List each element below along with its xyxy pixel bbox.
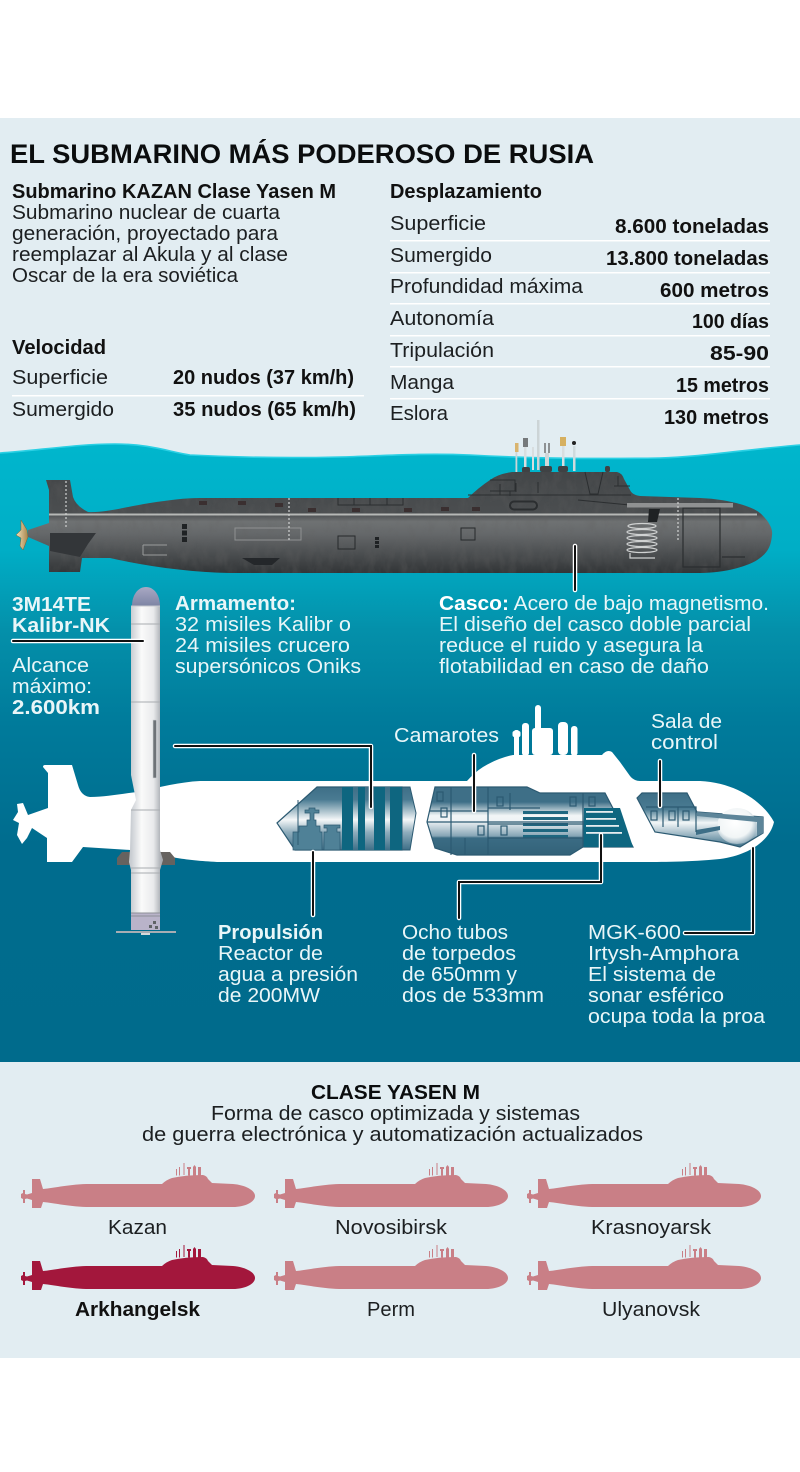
label: sonar: ocupa toda la proa — [588, 1006, 766, 1028]
label: torpedoes: de torpedos — [402, 943, 516, 965]
text block: submarine description: Submarino nuclear de cuarta — [12, 202, 281, 224]
compartment: propulsion — [277, 787, 416, 850]
fleet icon: Novosibirsk — [274, 1163, 508, 1208]
table: desplazamiento and specifications: Sumergido — [390, 245, 492, 267]
illustration: white submarine silhouette cutaway — [13, 705, 774, 862]
table: desplazamiento and specifications: Manga — [390, 372, 455, 394]
label: Arkhangelsk: Arkhangelsk — [75, 1299, 201, 1321]
leader line: sala de control — [658, 761, 662, 806]
label: torpedoes: Ocho tubos — [402, 922, 508, 944]
fleet icon: Perm — [274, 1245, 508, 1290]
label: casco: reduce el ruido y asegura la — [439, 635, 704, 657]
label: camarotes: Camarotes — [394, 725, 499, 747]
table: desplazamiento and specifications: Superficie — [390, 213, 486, 235]
leader line: armamento — [175, 746, 371, 807]
title: EL SUBMARINO MÁS PODEROSO DE RUSIA — [10, 138, 594, 169]
label: 3M14TE Kalibr-NK: 3M14TE — [12, 594, 91, 616]
text block: submarine description: reemplazar al Akula y al clase — [12, 244, 288, 266]
table: desplazamiento and specifications: 600 metros — [660, 280, 769, 302]
label: 3M14TE Kalibr-NK: máximo: — [12, 676, 92, 698]
table: desplazamiento and specifications: Eslora — [390, 403, 449, 425]
label: torpedoes: de 650mm y — [402, 964, 517, 986]
table: velocidad — [12, 337, 364, 421]
masts — [515, 420, 610, 473]
table: velocidad: 20 nudos (37 km/h) — [173, 367, 354, 389]
label: casco: flotabilidad en caso de daño — [439, 656, 709, 678]
heading: clase Yasen M: de guerra electrónica y automatización actualizados — [142, 1124, 643, 1146]
label: armamento: supersónicos Oniks — [175, 656, 361, 678]
table: velocidad: Velocidad — [12, 337, 106, 359]
silhouette masts — [512, 705, 578, 758]
table: velocidad: Sumergido — [12, 399, 114, 421]
table: desplazamiento and specifications: 8.600 toneladas — [615, 216, 769, 238]
heading: clase Yasen M — [142, 1082, 643, 1146]
label: armamento: 32 misiles Kalibr o — [175, 614, 351, 636]
label: 3M14TE Kalibr-NK: 2.600km — [12, 697, 100, 719]
text block: submarine description: generación, proyectado para — [12, 223, 279, 245]
leader line: propulsion — [311, 852, 315, 915]
heading: clase Yasen M: CLASE YASEN M — [311, 1082, 480, 1104]
label: Perm: Perm — [367, 1299, 415, 1321]
label: torpedoes — [402, 922, 544, 1007]
label: sala de control: Sala de — [651, 711, 722, 733]
label: sonar: El sistema de — [588, 964, 716, 986]
label: Kazan: Kazan — [108, 1217, 167, 1239]
label: sonar: sonar esférico — [588, 985, 724, 1007]
table: desplazamiento and specifications: 130 metros — [664, 407, 769, 429]
fleet icon: Ulyanovsk — [527, 1245, 761, 1290]
water background with wave line — [0, 444, 800, 1062]
leader line: casco — [573, 546, 577, 590]
hull — [28, 472, 772, 573]
label: Novosibirsk: Novosibirsk — [335, 1217, 448, 1239]
heading: clase Yasen M: Forma de casco optimizada y sistemas — [211, 1103, 580, 1125]
label: sala de control: control — [651, 732, 718, 754]
leader line: camarotes — [472, 755, 476, 811]
fleet icon: Krasnoyarsk — [527, 1163, 761, 1208]
fleet icon: Arkhangelsk highlighted — [21, 1245, 255, 1290]
label: armamento: Armamento: — [175, 593, 296, 615]
table: desplazamiento and specifications: Desplazamiento — [390, 181, 542, 203]
table: velocidad: 35 nudos (65 km/h) — [173, 399, 356, 421]
label: sonar: Irtysh-Amphora — [588, 943, 740, 965]
label: 3M14TE Kalibr-NK: Alcance — [12, 655, 89, 677]
table: desplazamiento and specifications: Tripulación — [390, 340, 494, 362]
leader line: sonar — [685, 848, 753, 933]
label: Krasnoyarsk: Krasnoyarsk — [591, 1217, 712, 1239]
text block: submarine description: Submarino KAZAN Clase Yasen M — [12, 181, 336, 203]
compartment: control and sonar — [637, 793, 763, 847]
label: propulsion: de 200MW — [218, 985, 320, 1007]
label: 3M14TE Kalibr-NK: Kalibr-NK — [12, 615, 111, 637]
label: armamento: 24 misiles crucero — [175, 635, 350, 657]
leader line: torpedoes — [459, 835, 601, 918]
label: propulsion: agua a presión — [218, 964, 358, 986]
table: velocidad: Superficie — [12, 367, 108, 389]
text block: submarine description: Oscar de la era soviética — [12, 265, 239, 287]
label: 3M14TE Kalibr-NK — [12, 594, 143, 719]
table: desplazamiento and specifications: 15 metros — [676, 375, 769, 397]
propeller — [16, 520, 28, 550]
hull details — [49, 472, 757, 567]
label: casco: El diseño del casco doble parcial — [439, 614, 751, 636]
text block: submarine description — [12, 181, 336, 287]
label: casco: Casco: Acero de bajo magnetismo. — [439, 593, 769, 615]
label: sonar: MGK-600 — [588, 922, 681, 944]
label: Ulyanovsk: Ulyanovsk — [602, 1299, 701, 1321]
missile: 3M14TE Kalibr-NK — [116, 587, 176, 935]
label: torpedoes: dos de 533mm — [402, 985, 544, 1007]
table: desplazamiento and specifications: Profundidad máxima — [390, 276, 584, 298]
top info panel — [0, 118, 800, 458]
label: sala de control — [651, 711, 722, 754]
table: desplazamiento and specifications: 13.800 toneladas — [606, 248, 769, 270]
table: desplazamiento and specifications: 85-90 — [710, 343, 769, 365]
table: desplazamiento and specifications — [390, 181, 770, 429]
illustration: Kazan submarine exterior — [16, 420, 772, 573]
label: propulsion: Reactor de — [218, 943, 323, 965]
label: casco — [439, 593, 769, 678]
table: desplazamiento and specifications: Autonomía — [390, 308, 495, 330]
bottom fleet panel — [0, 1060, 800, 1358]
compartment: camarotes and torpedoes — [427, 787, 633, 855]
label: armamento — [175, 593, 361, 678]
label: propulsion: Propulsión — [218, 922, 323, 944]
table: desplazamiento and specifications: 100 días — [692, 311, 769, 333]
fleet icon: Kazan — [21, 1163, 255, 1208]
label: propulsion — [218, 922, 358, 1007]
label: sonar — [588, 922, 766, 1028]
